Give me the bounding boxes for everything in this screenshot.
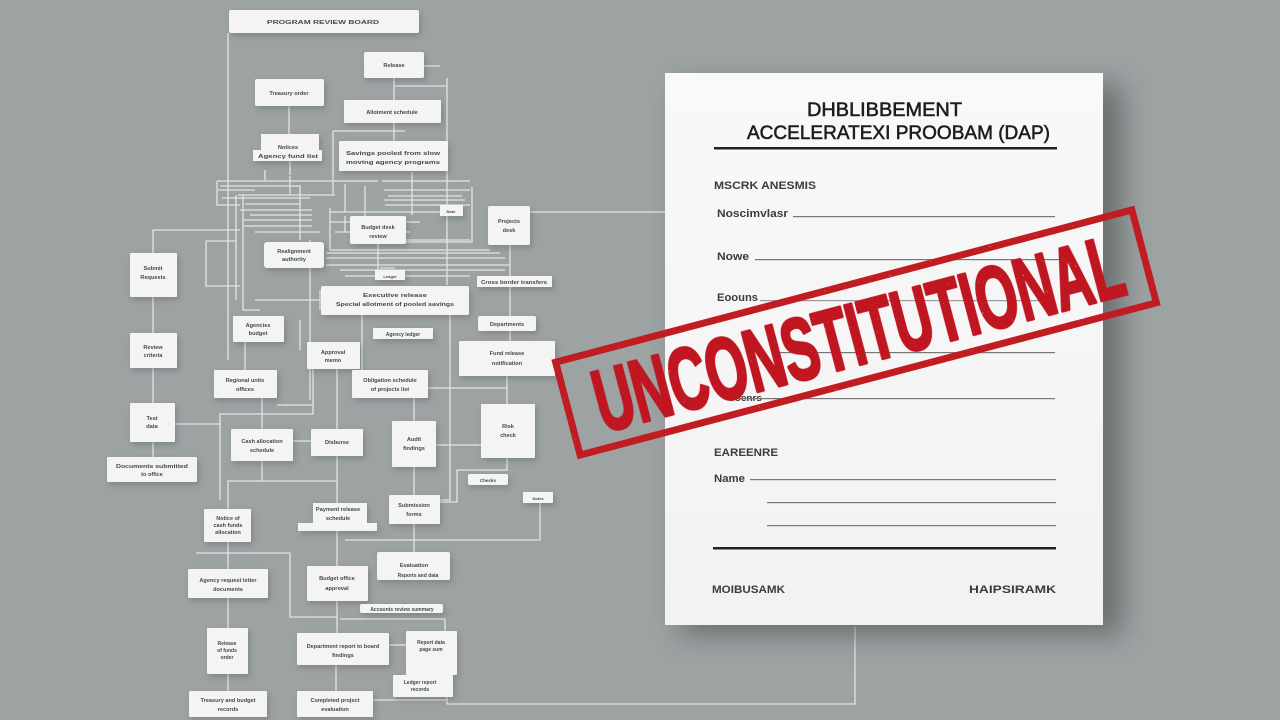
box: L <box>478 316 536 331</box>
box: B <box>364 52 424 78</box>
box: P: Approval <box>321 350 346 356</box>
box: small node 3: Cross border transfers <box>481 280 547 286</box>
box: T: to office <box>141 472 163 478</box>
box: small node 4: Agency ledger <box>386 332 420 338</box>
box: G: review <box>369 234 387 240</box>
box: AJ: Report data <box>417 640 445 646</box>
box: N: Fund release <box>490 351 524 357</box>
box: AB: cash funds <box>213 523 243 529</box>
box: AB <box>204 509 251 542</box>
box: V: Disburse <box>325 440 349 446</box>
box: U: Cash allocation <box>241 439 283 445</box>
box: AH: of funds <box>217 648 237 654</box>
box: AG <box>360 604 443 613</box>
box: AB: Notice of <box>216 516 240 522</box>
box: J <box>130 253 177 297</box>
document title <box>747 100 1050 144</box>
form section 1: Eoouns <box>717 292 758 304</box>
box: Y <box>468 474 508 485</box>
box: small node 3 <box>477 276 552 287</box>
box: AA: forms <box>406 512 422 518</box>
box: E <box>253 134 322 161</box>
box: Q: Regional units <box>226 378 264 384</box>
box: I: authority <box>282 257 307 263</box>
box: B: Release <box>383 63 405 69</box>
box: K <box>321 286 469 315</box>
box: S: Test <box>146 416 158 422</box>
box: small node 2: Ledger <box>383 274 397 279</box>
box: R <box>352 370 428 398</box>
box: W <box>392 421 436 467</box>
box: AB: allocation <box>215 530 241 536</box>
flowchart diagram <box>107 10 855 717</box>
box: AH: order <box>221 655 233 661</box>
form section 1: Soenrs <box>728 393 762 403</box>
box: X: Risk <box>502 424 515 430</box>
box: P: memo <box>325 358 342 364</box>
box: J: Submit <box>144 266 163 272</box>
box: C: Treasury order <box>269 91 309 97</box>
box: AG: Accounts review summary <box>370 607 434 613</box>
box: AJ: page sum <box>419 647 443 653</box>
box: AE <box>188 569 268 598</box>
box: AC: Payment release <box>316 507 360 513</box>
title rule <box>714 147 1057 150</box>
box: T <box>107 457 197 482</box>
box: S <box>130 403 175 442</box>
box: M <box>130 333 177 368</box>
box: R: of projects list <box>371 387 409 393</box>
box: H: Projects <box>498 219 520 225</box>
box: AE: Agency request letter <box>199 578 257 584</box>
box: K: Executive release <box>363 293 427 299</box>
box: AL <box>189 691 267 717</box>
box: D: Allotment schedule <box>366 110 418 116</box>
box: R: Obligation schedule <box>363 378 417 384</box>
box: E: Notices <box>278 145 298 151</box>
box: N <box>459 341 555 376</box>
box: Q: offices <box>236 387 254 393</box>
box: P <box>307 342 360 369</box>
box: AK: records <box>411 687 429 693</box>
box: AH <box>207 628 248 674</box>
box: AF: approval <box>325 586 349 592</box>
box: K: Special allotment of pooled savings <box>336 302 454 308</box>
box: AK: Ledger report <box>404 680 437 686</box>
box: AC <box>298 503 377 531</box>
document title: ACCELERATEXI PROOBAM (DAP) <box>747 123 1050 144</box>
box: O: Agencies <box>246 323 270 329</box>
box: O <box>233 316 284 342</box>
form section 2 <box>714 447 1056 526</box>
footer labels: MOIBUSAMK <box>712 584 785 596</box>
document panel <box>665 73 1103 625</box>
box: G <box>350 216 406 244</box>
box: W: findings <box>403 446 425 452</box>
box: H <box>488 206 530 245</box>
box: I <box>264 242 324 268</box>
form section 1: Noscimvlasr <box>717 208 789 220</box>
box: AA: Submission <box>398 503 430 509</box>
box: M: criteria <box>144 353 163 359</box>
box: C <box>255 79 324 106</box>
box: N: notification <box>492 361 523 367</box>
box: small node <box>440 205 463 216</box>
form section 2: Name <box>714 473 745 485</box>
box: AK <box>393 675 453 697</box>
box: AC: schedule <box>326 516 350 522</box>
box: small node 2 <box>375 270 405 280</box>
box: AM: evaluation <box>321 707 349 713</box>
form section 1 <box>714 180 1060 403</box>
box: X <box>481 404 535 458</box>
box: F: Savings pooled from slow <box>346 151 441 157</box>
box: AA <box>389 495 440 524</box>
box: AI: findings <box>332 653 354 659</box>
box: E: Agency fund list <box>258 154 318 160</box>
box: J: Requests <box>140 275 166 281</box>
box: AM <box>297 691 373 717</box>
box: small node 4 <box>373 328 433 339</box>
form section 1: MSCRK ANESMIS <box>714 180 816 192</box>
box: F: moving agency programs <box>346 160 440 166</box>
box: AL: Treasury and budget <box>200 698 256 704</box>
box: AL: records <box>218 707 238 713</box>
box: small node: Note <box>447 209 456 214</box>
stamp: unconstitutional <box>556 210 1157 458</box>
box: AD <box>377 552 450 580</box>
box: AM: Completed project <box>310 698 360 704</box>
document shadow <box>680 85 1122 635</box>
box: T: Documents submitted <box>116 464 189 470</box>
box: Q <box>214 370 277 398</box>
footer labels <box>712 584 1056 596</box>
box: F <box>339 141 448 171</box>
box: AI <box>297 633 389 665</box>
connector lines <box>153 33 855 704</box>
box: AD: Reports and data <box>398 573 439 579</box>
box: L: Departments <box>490 322 524 328</box>
box: I: Realignment <box>277 249 311 255</box>
box: top header: PROGRAM REVIEW BOARD <box>267 20 379 26</box>
flowchart boxes <box>107 10 555 717</box>
box: AE: documents <box>213 587 243 593</box>
box: X: check <box>500 433 517 439</box>
box: V <box>311 429 363 456</box>
box: U <box>231 429 293 461</box>
document title: DHBLIBBEMENT <box>807 100 962 121</box>
form section 1: Nowe <box>717 251 749 263</box>
box: AJ <box>406 631 457 675</box>
box: AI: Department report to board <box>307 644 380 650</box>
form section 2: EAREENRE <box>714 447 778 459</box>
box: top header <box>229 10 419 33</box>
bottom rule <box>713 547 1056 550</box>
box: AH: Release <box>218 641 237 647</box>
box: Z <box>523 492 553 503</box>
box: W: Audit <box>407 437 421 443</box>
box: U: schedule <box>250 448 274 454</box>
box: O: budget <box>249 331 267 337</box>
box: S: data <box>146 424 159 430</box>
box: AD: Evaluation <box>400 563 429 569</box>
box: AF: Budget office <box>319 576 355 582</box>
box: D <box>344 100 441 123</box>
box: AF <box>307 566 368 601</box>
box: Z: Notes <box>532 496 544 501</box>
footer labels: HAIPSIRAMK <box>969 584 1056 596</box>
box: G: Budget desk <box>361 225 396 231</box>
box: H: desk <box>503 228 516 234</box>
box: M: Review <box>143 345 163 351</box>
box: Y: Checks <box>480 478 496 483</box>
